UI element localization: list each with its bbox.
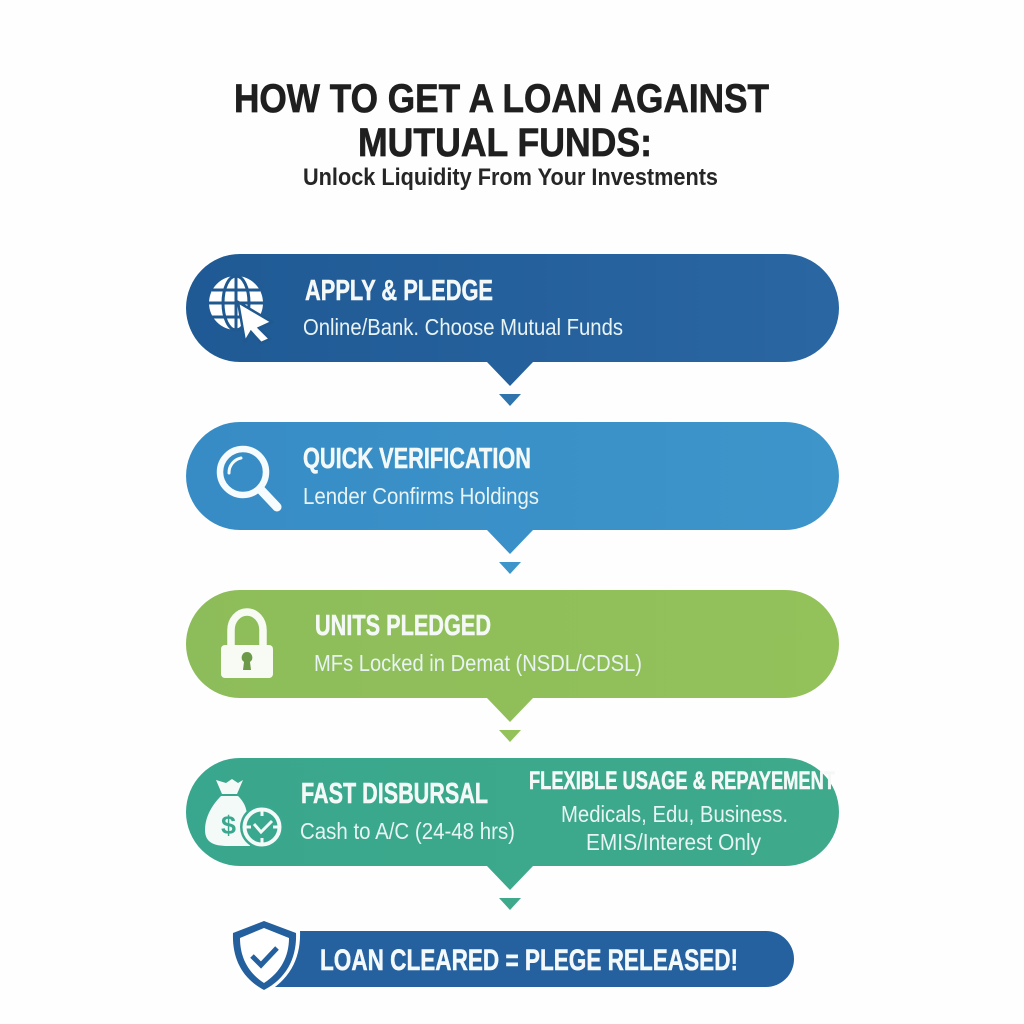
description: Lender Confirms Holdings bbox=[303, 483, 539, 509]
panel shape bbox=[186, 422, 839, 554]
description: fast disbursal: Cash to A/C (24-48 hrs) bbox=[300, 818, 515, 844]
icon: globe with cursor bbox=[209, 276, 272, 343]
icon: shield with check bbox=[229, 917, 300, 994]
panel: apply and pledge bbox=[186, 254, 839, 406]
arrow bbox=[499, 898, 521, 910]
panel shape bbox=[186, 590, 839, 722]
heading: fast disbursal: FAST DISBURSAL bbox=[301, 778, 488, 810]
heading: APPLY & PLEDGE bbox=[305, 275, 493, 307]
title bbox=[234, 77, 769, 165]
icon: money bag and clock: $ bbox=[221, 810, 237, 840]
heading: QUICK VERIFICATION bbox=[303, 443, 531, 475]
panel: quick verification bbox=[186, 422, 839, 574]
icon: padlock bbox=[221, 612, 273, 678]
banner: loan cleared bbox=[229, 917, 794, 994]
banner text: LOAN CLEARED = PLEGE RELEASED! bbox=[320, 944, 738, 977]
panel: units pledged bbox=[186, 590, 839, 742]
panel shape bbox=[186, 254, 839, 386]
description: flexible usage bbox=[561, 801, 788, 855]
arrow bbox=[499, 730, 521, 742]
description: flexible usage: EMIS/Interest Only bbox=[586, 829, 761, 855]
title: MUTUAL FUNDS: bbox=[358, 121, 652, 165]
panel shape bbox=[186, 758, 839, 890]
heading: UNITS PLEDGED bbox=[315, 610, 491, 642]
icon: magnifying glass bbox=[220, 449, 277, 507]
subtitle: Unlock Liquidity From Your Investments bbox=[303, 164, 718, 191]
icon: money bag and clock bbox=[205, 779, 284, 849]
description: flexible usage: Medicals, Edu, Business. bbox=[561, 801, 788, 827]
banner shape bbox=[275, 931, 794, 987]
arrow bbox=[499, 562, 521, 574]
description: Online/Bank. Choose Mutual Funds bbox=[303, 314, 623, 340]
arrow bbox=[499, 394, 521, 406]
panel: fast disbursal and flexible usage bbox=[186, 758, 839, 910]
description: MFs Locked in Demat (NSDL/CDSL) bbox=[314, 650, 642, 676]
title: HOW TO GET A LOAN AGAINST bbox=[234, 77, 769, 121]
heading: flexible usage: FLEXIBLE USAGE & REPAYEMENT bbox=[529, 767, 835, 795]
